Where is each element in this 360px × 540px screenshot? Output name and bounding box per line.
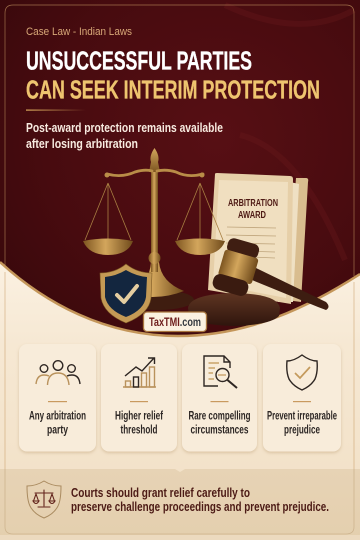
card divider <box>210 401 228 402</box>
illustration: gavel <box>188 236 328 326</box>
subtitle: after losing arbitration <box>26 137 138 151</box>
card label <box>115 410 163 436</box>
card divider <box>48 401 67 402</box>
card label: Rare compelling <box>188 410 250 422</box>
card label: Any arbitration <box>29 410 86 422</box>
icon: people <box>36 361 80 385</box>
illustration: arbitration award document: ARBITRATION <box>228 197 278 209</box>
illustration: arbitration award document <box>208 173 308 304</box>
subtitle <box>26 121 223 151</box>
card label: party <box>47 424 68 436</box>
card label: threshold <box>120 424 158 436</box>
card label <box>267 410 337 436</box>
icon: document with magnifier <box>204 356 237 388</box>
eyebrow: category label: Case Law - Indian Laws <box>26 26 132 38</box>
icon: rising bars <box>123 358 156 387</box>
background: cream lower section <box>0 262 360 540</box>
gold curve edge <box>0 262 360 336</box>
panel: conclusion band <box>0 469 360 540</box>
title: UNSUCCESSFUL PARTIES <box>26 46 252 76</box>
title <box>26 46 320 104</box>
conclusion text: Courts should grant relief carefully to <box>71 486 250 500</box>
card divider <box>130 401 148 402</box>
logo badge: TaxTMI.com <box>144 312 206 332</box>
card label: circumstances <box>190 424 248 436</box>
conclusion text <box>71 486 329 514</box>
logo badge: TaxTMI.com: TaxTMI.com <box>149 317 201 329</box>
illustration: arbitration award document: AWARD <box>238 209 266 221</box>
icon: shield check <box>287 355 317 390</box>
illustration: shield with check <box>100 264 152 323</box>
panel: any arbitration party <box>19 344 96 452</box>
card label <box>29 410 86 436</box>
illustration: balance scale <box>83 148 225 310</box>
card label: prejudice <box>284 424 320 436</box>
panel: higher relief threshold <box>101 344 177 452</box>
background: maroon header <box>0 0 360 345</box>
panel: rare compelling circumstances <box>182 344 257 452</box>
card divider <box>293 401 311 402</box>
panel: prevent irreparable prejudice <box>263 344 341 452</box>
card label: Higher relief <box>115 410 163 422</box>
icon: shield with scales <box>27 481 61 518</box>
card label <box>188 410 250 436</box>
title divider <box>26 110 86 111</box>
subtitle: Post-award protection remains available <box>26 121 223 135</box>
decorative arcs <box>225 5 354 260</box>
